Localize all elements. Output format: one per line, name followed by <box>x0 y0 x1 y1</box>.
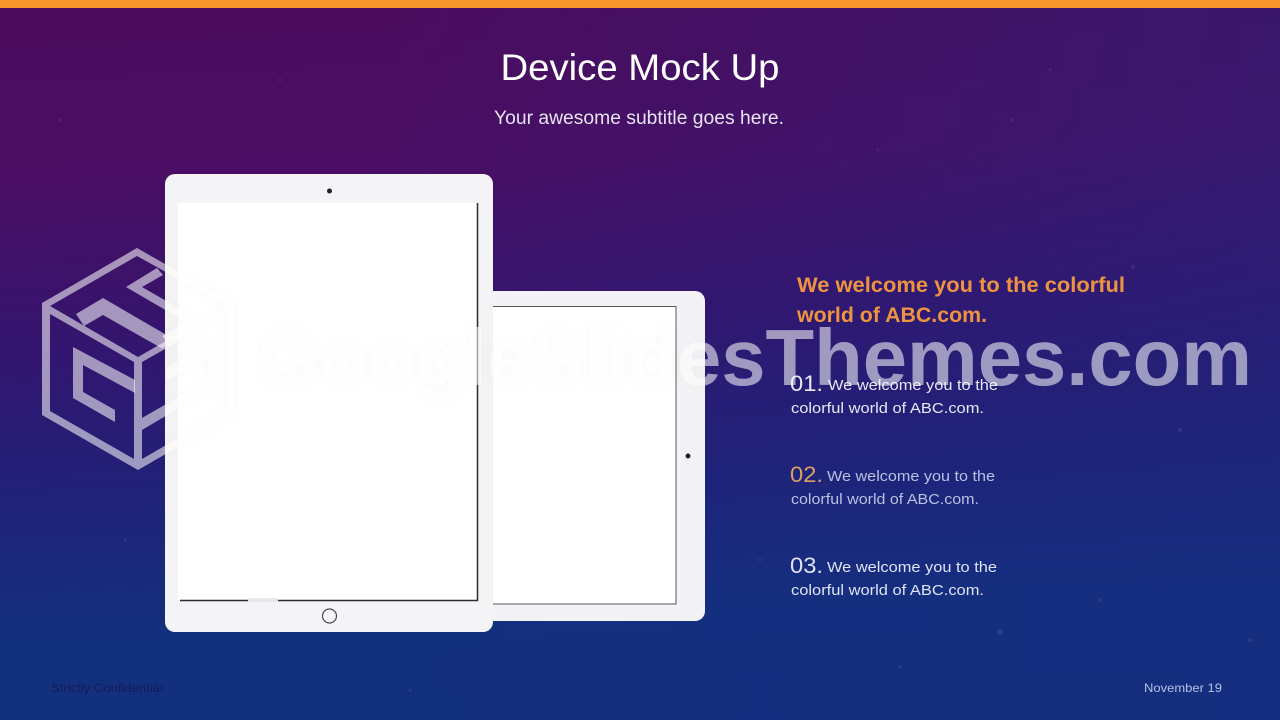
watermark logo <box>42 248 235 470</box>
list item 03: We welcome you to the <box>827 559 997 576</box>
list item 03 <box>790 553 997 599</box>
right column heading: We welcome you to the colorful <box>797 274 1125 297</box>
list item 01: We welcome you to the <box>828 377 998 394</box>
list item 01: 01. <box>790 371 823 396</box>
list item 02: colorful world of ABC.com. <box>791 491 979 508</box>
right column heading <box>796 274 1125 327</box>
list item 03: colorful world of ABC.com. <box>791 582 984 599</box>
list item 01: colorful world of ABC.com. <box>791 400 984 417</box>
small tablet screen <box>480 306 676 604</box>
list item 01 <box>790 371 998 417</box>
top accent bar <box>0 0 1280 8</box>
list item 02 <box>790 462 995 508</box>
subtitle: Your awesome subtitle goes here. <box>494 108 784 129</box>
small tablet camera <box>686 454 690 458</box>
device: small tablet (landscape back) <box>470 291 705 621</box>
title: Device Mock Up <box>500 47 780 88</box>
list item 02: We welcome you to the <box>827 468 995 485</box>
right column heading: world of ABC.com. <box>796 304 987 327</box>
watermark wordmark: GoogleSlidesThemes.com <box>257 313 1252 402</box>
large tablet camera <box>327 188 332 194</box>
device: large tablet (front) <box>165 174 493 632</box>
watermark <box>42 248 1252 470</box>
footer: date: November 19 <box>1144 681 1222 695</box>
list item 02: 02. <box>790 462 823 487</box>
large tablet screen <box>178 203 477 600</box>
home button <box>322 609 336 623</box>
list item 03: 03. <box>790 553 823 578</box>
footer: confidentiality note: Strictly Confidential <box>51 681 163 695</box>
